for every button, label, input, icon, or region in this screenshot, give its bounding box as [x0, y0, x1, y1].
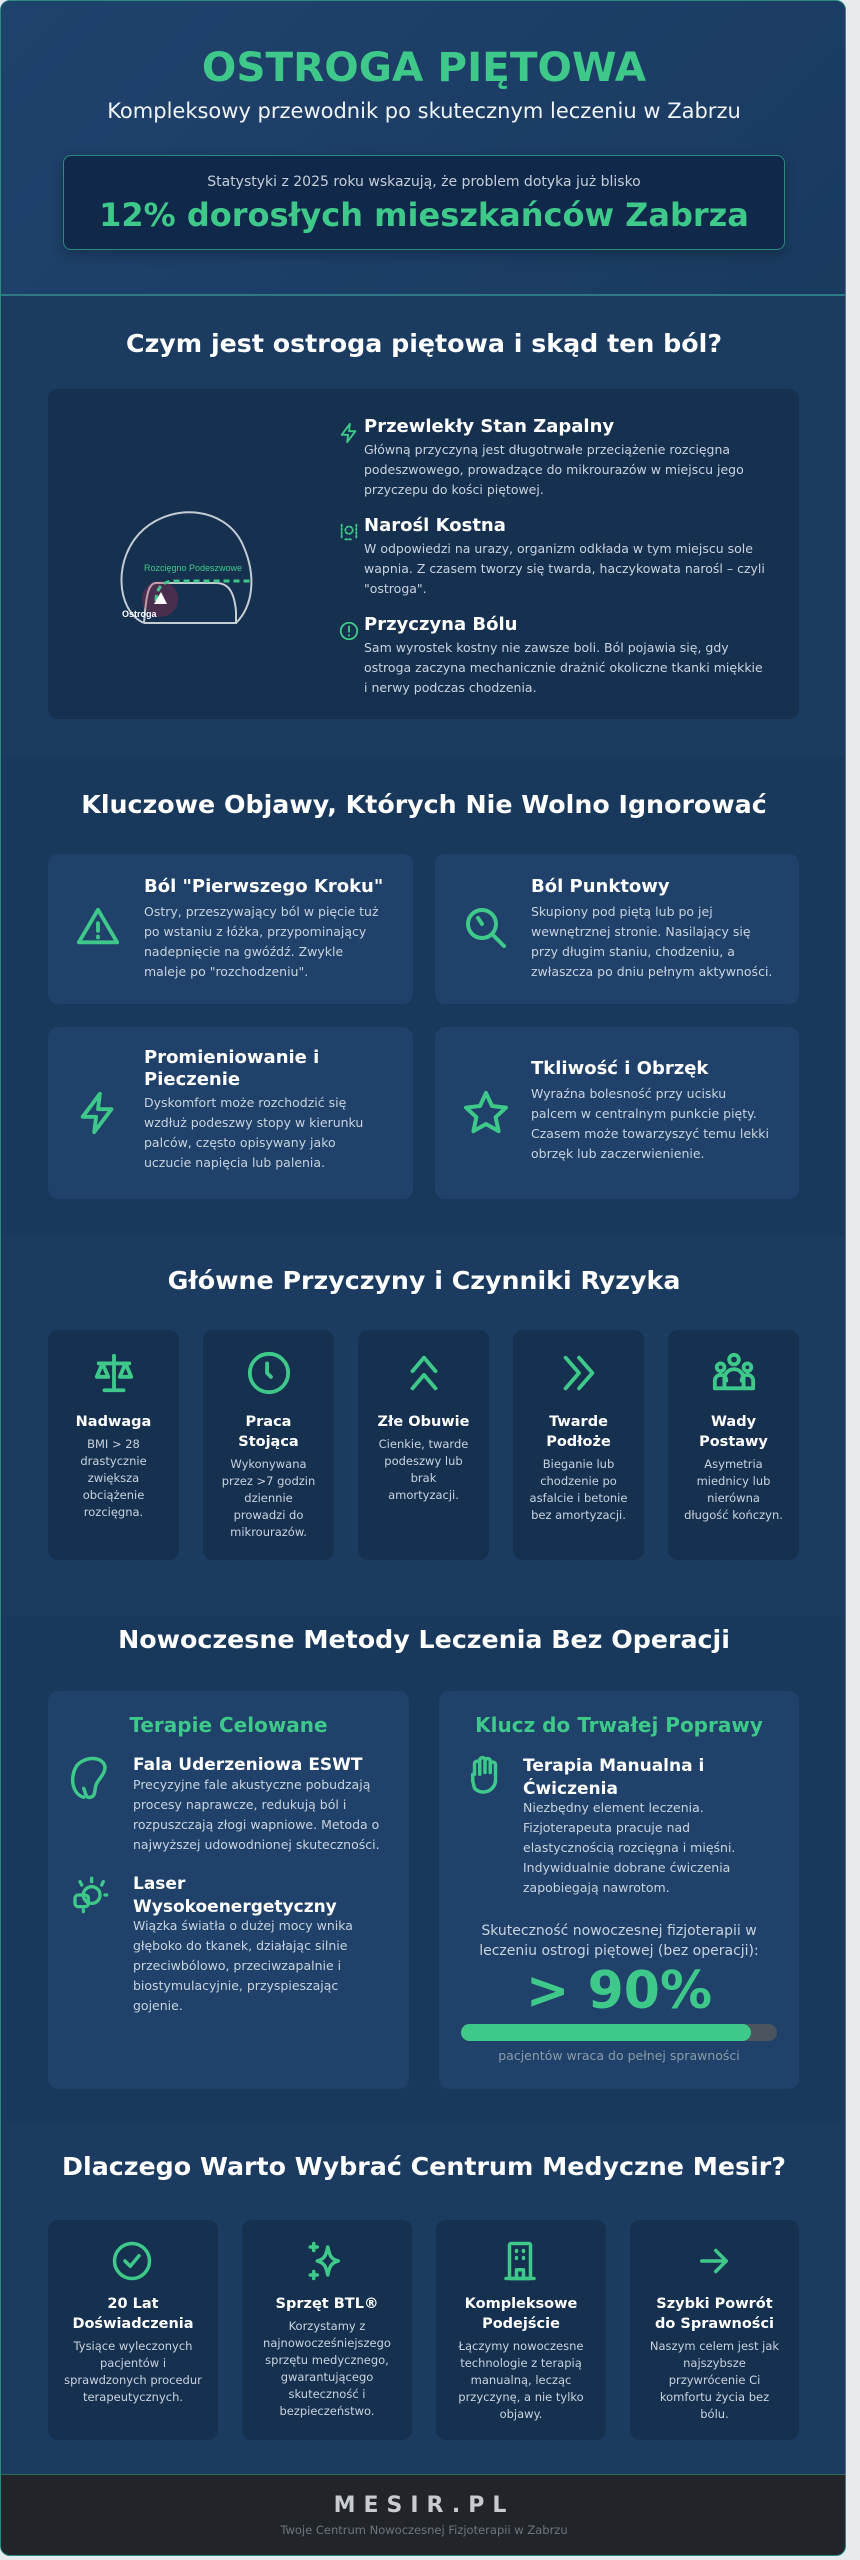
card: shoes: Złe Obuwie: [377, 1414, 470, 1430]
card: first step pain: po wstaniu z łóżka, przypominający: [144, 924, 366, 939]
item: laser: przeciwbólowo, przeciwzapalnie i: [133, 1958, 341, 1973]
card: hard surfaces: Twarde: [549, 1414, 608, 1430]
card: comprehensive: Podejście: [482, 2316, 560, 2332]
card: equipment: Korzystamy z: [289, 2319, 365, 2333]
card: shoes: Cienkie, twarde: [379, 1437, 468, 1451]
card: radiating: Dyskomfort może rozchodzić się: [144, 1095, 346, 1110]
card: overweight: [48, 1330, 179, 1560]
icon: magnifier: [466, 908, 506, 948]
card: radiating: Promieniowanie i: [144, 1047, 319, 1068]
card: point pain: Ból Punktowy: [531, 876, 670, 897]
diagram: heel: Rozcięgno Podeszwowe: [144, 563, 242, 573]
panel: targeted therapies: Terapie Celowane: [129, 1713, 328, 1737]
item: bone growth: wapnia. Z czasem tworzy się twarda, haczykowata narośl – czyli: [364, 561, 765, 576]
card: posture: długość kończyn.: [684, 1508, 783, 1522]
card: radiating: palców, często opisywany jako: [144, 1135, 336, 1150]
card: standing work: [203, 1330, 334, 1560]
item: inflammation: Przewlekły Stan Zapalny: [364, 416, 614, 437]
card: equipment: Sprzęt BTL®: [276, 2296, 378, 2312]
card: point pain: Skupiony pod piętą lub po jej: [531, 904, 713, 919]
card: experience: terapeutycznych.: [83, 2390, 183, 2404]
card: radiating: wzdłuż podeszwy stopy w kierunku: [144, 1115, 363, 1130]
title: OSTROGA PIĘTOWA: [202, 43, 646, 91]
card: first step pain: [48, 854, 413, 1004]
icon: clock: [248, 1352, 290, 1394]
section: causes: [1, 1236, 847, 1616]
item: laser: gojenie.: [133, 1998, 183, 2013]
card: radiating: uczucie napięcia lub palenia.: [144, 1155, 325, 1170]
icon: sparkles: [308, 2242, 340, 2280]
card: shoes: amortyzacji.: [388, 1488, 459, 1502]
stat: effectiveness: pacjentów wraca do pełnej sprawności: [498, 2048, 740, 2063]
item: ESWT: procesy naprawcze, redukują ból i: [133, 1797, 346, 1812]
icon: alert: [340, 622, 358, 640]
card: comprehensive: Kompleksowe: [465, 2296, 577, 2312]
card: shoes: [358, 1330, 489, 1560]
heading: Dlaczego Warto Wybrać Centrum Medyczne Mesir?: [62, 2152, 786, 2181]
progress bar: [461, 2024, 777, 2041]
icon: hand: [471, 1756, 498, 1794]
card: overweight: drastycznie: [80, 1454, 147, 1468]
icon: laser: [73, 1876, 108, 1914]
item: pain cause: ostroga zaczyna mechanicznie drażnić okoliczne tkanki miękkie: [364, 660, 763, 675]
card: comprehensive: technologie z terapią: [460, 2356, 582, 2370]
card: overweight: obciążenie: [83, 1488, 144, 1502]
card: hard surfaces: Bieganie lub: [543, 1457, 614, 1471]
card: tenderness: obrzęk lub zaczerwienienie.: [531, 1146, 705, 1161]
card: standing work: dziennie: [244, 1491, 293, 1505]
tagline: Twoje Centrum Nowoczesnej Fizjoterapii w Zabrzu: [280, 2523, 568, 2537]
card: shoes: brak: [411, 1471, 436, 1485]
stat callout: [63, 155, 785, 250]
icon: bolt: [80, 1092, 114, 1134]
card: first step pain: Ból "Pierwszego Kroku": [144, 876, 383, 897]
card: point pain: zwłaszcza po dniu pełnym aktywności.: [531, 964, 772, 979]
item: pain cause: Sam wyrostek kostny nie zawsze boli. Ból pojawia się, gdy: [364, 640, 729, 655]
item: bone growth: W odpowiedzi na urazy, organizm odkłada w tym miejscu sole: [364, 541, 753, 556]
item: bone growth: "ostroga".: [364, 581, 427, 596]
panel: key to improvement: Klucz do Trwałej Poprawy: [475, 1713, 763, 1737]
card: posture: Postawy: [699, 1434, 768, 1450]
section: what is heel spur: [1, 298, 847, 756]
card: point pain: wewnętrznej stronie. Nasilający się: [531, 924, 751, 939]
item: laser: Laser: [133, 1874, 185, 1894]
stat: effectiveness: leczeniu ostrogi piętowej (bez operacji):: [479, 1943, 759, 1959]
item: pain cause: Przyczyna Bólu: [364, 614, 517, 635]
icon: shockwave: [70, 1756, 107, 1800]
card: experience: Doświadczenia: [72, 2316, 194, 2332]
card: comprehensive: Łączymy nowoczesne: [459, 2339, 583, 2353]
card: fast return: bólu.: [700, 2407, 729, 2421]
icon: check: [112, 2242, 152, 2280]
item: ESWT: Precyzyjne fale akustyczne pobudzają: [133, 1777, 370, 1792]
card: fast return: do Sprawności: [655, 2316, 774, 2332]
card: tenderness: Czasem może towarzyszyć temu lekki: [531, 1126, 769, 1141]
panel: targeted therapies: [48, 1691, 409, 2089]
item: inflammation: [340, 416, 744, 497]
card: posture: [668, 1330, 799, 1560]
card: first step pain: Ostry, przeszywający ból w pięcie tuż: [144, 904, 379, 919]
item: manual therapy: Indywidualnie dobrane ćwiczenia: [523, 1860, 730, 1875]
card: standing work: mikrourazów.: [230, 1525, 307, 1539]
card: point pain: [435, 854, 799, 1004]
section: symptoms: [1, 756, 847, 1236]
stat callout: 12% dorosłych mieszkańców Zabrza: [99, 196, 749, 234]
card: overweight: rozcięgna.: [84, 1505, 143, 1519]
item: laser: głęboko do tkanek, działając silnie: [133, 1938, 347, 1953]
card: radiating: Pieczenie: [144, 1069, 240, 1090]
icon: bolt: [340, 422, 356, 444]
heading: Nowoczesne Metody Leczenia Bez Operacji: [118, 1625, 730, 1654]
card: equipment: [242, 2220, 412, 2440]
card: tenderness: Wyraźna bolesność przy ucisku: [531, 1086, 726, 1101]
stat: effectiveness: [461, 1923, 777, 2063]
diagram: heel: Ostroga: [122, 609, 158, 619]
icon: people: [712, 1352, 756, 1390]
card: fast return: Szybki Powrót: [656, 2296, 773, 2312]
icon: star: [464, 1090, 508, 1134]
diagram: heel: [120, 511, 252, 624]
card: radiating: [48, 1027, 413, 1199]
heading: Główne Przyczyny i Czynniki Ryzyka: [168, 1266, 680, 1295]
card: hard surfaces: bez amortyzacji.: [531, 1508, 626, 1522]
card: fast return: [630, 2220, 799, 2440]
card: first step pain: nadepnięcie na gwóźdź. Zwykle: [144, 944, 343, 959]
card: comprehensive: manualną, lecząc: [471, 2373, 571, 2387]
card: hard surfaces: asfalcie i betonie: [530, 1491, 627, 1505]
card: fast return: przywrócenie Ci: [669, 2373, 760, 2387]
item: laser: biostymulacyjnie, przyspieszając: [133, 1978, 338, 1993]
item: pain cause: i nerwy podczas chodzenia.: [364, 680, 537, 695]
card: posture: Wady: [711, 1414, 756, 1430]
item: laser: [73, 1874, 353, 2013]
icon: chevrons up: [410, 1356, 438, 1390]
section: why us: [1, 2121, 847, 2474]
card: standing work: przez >7 godzin: [222, 1474, 315, 1488]
footer: [1, 2474, 847, 2557]
icon: warning: [76, 908, 120, 944]
item: ESWT: najwyższej udowodnionej skuteczności.: [133, 1837, 380, 1852]
card: equipment: skuteczność i: [288, 2387, 366, 2401]
card: overweight: BMI > 28: [87, 1437, 140, 1451]
item: ESWT: Fala Uderzeniowa ESWT: [133, 1755, 363, 1775]
icon: scale: [94, 1354, 134, 1392]
item: inflammation: Główną przyczyną jest długotrwałe przeciążenie rozcięgna: [364, 442, 730, 457]
item: inflammation: podeszwowego, prowadzące do mikrourazów w miejscu jego: [364, 462, 744, 477]
card: point pain: przy długim staniu, chodzeniu, a: [531, 944, 735, 959]
card: posture: nierówna: [707, 1491, 760, 1505]
item: manual therapy: Fizjoterapeuta pracuje nad: [523, 1820, 690, 1835]
icon: arrow: [700, 2248, 728, 2274]
item: pain cause: [340, 614, 763, 695]
subtitle: Kompleksowy przewodnik po skutecznym leczeniu w Zabrzu: [107, 99, 741, 123]
card: tenderness: Tkliwość i Obrzęk: [531, 1058, 708, 1079]
stat: effectiveness: > 90%: [526, 1961, 712, 2021]
item: laser: Wysokoenergetyczny: [133, 1897, 337, 1917]
icon: chevrons right: [564, 1356, 594, 1390]
icon: building: [504, 2242, 536, 2280]
card: standing work: Wykonywana: [230, 1457, 307, 1471]
item: laser: Wiązka światła o dużej mocy wnika: [133, 1918, 353, 1933]
item: manual therapy: [471, 1756, 735, 1895]
card: equipment: najnowocześniejszego: [263, 2336, 391, 2350]
item: inflammation: przyczepu do kości piętowej.: [364, 482, 544, 497]
card: hard surfaces: chodzenie po: [540, 1474, 617, 1488]
card: standing work: Stojąca: [238, 1434, 299, 1450]
item: bone growth: Narośl Kostna: [364, 515, 506, 536]
panel: key to improvement: [439, 1691, 799, 2089]
item: manual therapy: Niezbędny element leczenia.: [523, 1800, 704, 1815]
card: tenderness: palcem w centralnym punkcie pięty.: [531, 1106, 757, 1121]
stat callout: Statystyki z 2025 roku wskazują, że problem dotyka już blisko: [207, 174, 641, 190]
card: comprehensive: [436, 2220, 606, 2440]
card: hard surfaces: [513, 1330, 644, 1560]
card: fast return: najszybsze: [683, 2356, 746, 2370]
item: manual therapy: elastycznością rozcięgna i mięśni.: [523, 1840, 735, 1855]
item: manual therapy: Ćwiczenia: [523, 1779, 618, 1799]
card: hard surfaces: Podłoże: [546, 1434, 611, 1450]
card: experience: sprawdzonych procedur: [64, 2373, 202, 2387]
card: posture: Asymetria: [704, 1457, 763, 1471]
item: bone growth: [340, 515, 765, 596]
header: [1, 1, 847, 296]
card: equipment: bezpieczeństwo.: [279, 2404, 375, 2418]
heading: Czym jest ostroga piętowa i skąd ten ból?: [126, 329, 722, 358]
card: tenderness: [435, 1027, 799, 1199]
panel: explanation: [48, 389, 799, 719]
card: first step pain: maleje po "rozchodzeniu".: [144, 964, 308, 979]
card: experience: 20 Lat: [107, 2296, 159, 2312]
card: overweight: zwiększa: [88, 1471, 139, 1485]
section: treatment: [1, 1616, 847, 2121]
card: shoes: podeszwy lub: [384, 1454, 463, 1468]
item: manual therapy: zapobiegają nawrotom.: [523, 1880, 670, 1895]
card: experience: [48, 2220, 218, 2440]
card: posture: miednicy lub: [697, 1474, 770, 1488]
stat: effectiveness: Skuteczność nowoczesnej fizjoterapii w: [481, 1923, 757, 1939]
item: ESWT: rozpuszczają złogi wapniowe. Metoda o: [133, 1817, 379, 1832]
heading: Kluczowe Objawy, Których Nie Wolno Ignorować: [81, 790, 767, 819]
card: standing work: Praca: [246, 1414, 291, 1430]
icon: growth: [340, 524, 358, 540]
card: comprehensive: przyczynę, a nie tylko: [458, 2390, 584, 2404]
card: standing work: prowadzi do: [234, 1508, 303, 1522]
card: equipment: sprzętu medycznego,: [265, 2353, 389, 2367]
card: experience: Tysiące wyleczonych: [74, 2339, 192, 2353]
item: manual therapy: Terapia Manualna i: [523, 1756, 704, 1776]
card: overweight: Nadwaga: [76, 1414, 151, 1430]
card: equipment: gwarantującego: [281, 2370, 373, 2384]
item: ESWT: [70, 1755, 380, 1852]
card: comprehensive: objawy.: [500, 2407, 542, 2421]
brand: MESIR.PL: [334, 2493, 514, 2518]
card: fast return: komfortu życia bez: [660, 2390, 769, 2404]
card: fast return: Naszym celem jest jak: [650, 2339, 779, 2353]
card: experience: pacjentów i: [100, 2356, 166, 2370]
